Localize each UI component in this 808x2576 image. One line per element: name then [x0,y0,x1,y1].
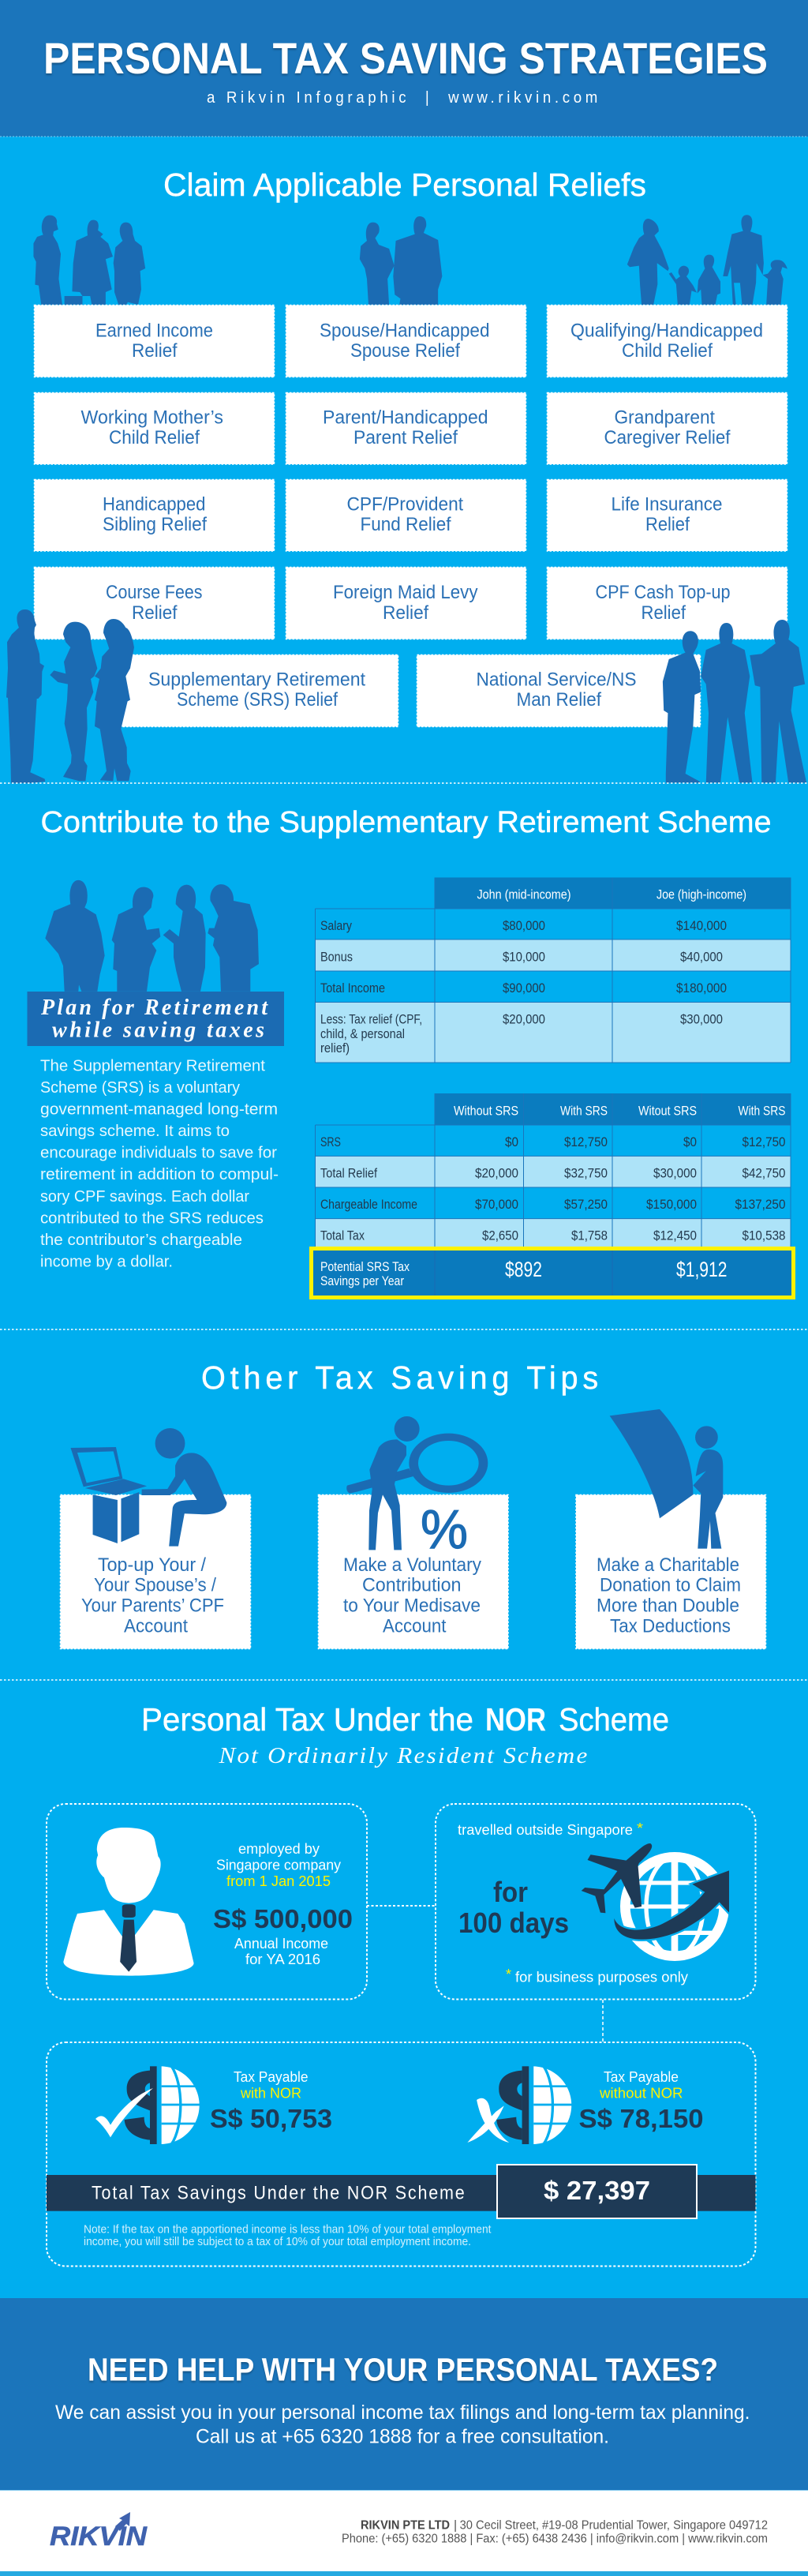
panel: travel days [436,1804,756,1999]
card: foreign maid levy: Relief [383,602,428,624]
table: John vs Joe income: Less: Tax relief (CPF, [320,1012,422,1026]
card: grandparent [548,393,787,464]
contact details: 30 Cecil Street, #19-08 Prudential Tower, Singapore 049712 [460,2518,768,2532]
panel: annual income: from 1 Jan 2015 [226,1873,331,1889]
panel: tax payable comparison: S$ 50,753 [210,2104,332,2133]
table: with and without SRS: $2,650 [482,1229,518,1243]
panel: CPF top-up tip: Account [124,1615,188,1637]
card: parent relief [286,393,526,464]
icon: person with magnifier [346,1416,488,1550]
paragraph: SRS explanation [40,1058,279,1271]
table: with and without SRS: $30,000 [653,1166,697,1180]
contact details: | [454,2518,457,2532]
table: with and without SRS: $70,000 [475,1198,518,1212]
banner: plan for retirement [27,992,284,1046]
panel: CPF top-up tip: Your Spouse’s / [94,1575,216,1596]
icon: percent sign: % [421,1498,468,1560]
panel: travel days: travelled outside Singapore [458,1821,633,1838]
contact details: Phone: (+65) 6320 1888 | Fax: (+65) 6438 2436 | info@rikvin.com | www.rikvin.com [342,2533,768,2546]
icon: dollar globe with check [95,2066,200,2144]
call to action panel: Call us at +65 6320 1888 for a free consultation. [196,2426,609,2448]
panel: CPF top-up tip [60,1428,251,1648]
paragraph: SRS explanation: sory CPF savings. Each dollar [40,1188,249,1206]
panel: donation tip: More than Double [597,1595,739,1617]
silhouettes above relief cards [33,215,787,305]
table: John vs Joe income: $10,000 [503,951,545,965]
card: CPF cash top-up: CPF Cash Top-up [595,582,731,603]
panel: annual income: employed by [238,1840,320,1857]
card: working mother: Child Relief [109,427,200,448]
note text: income, you will still be subject to a tax of 10% of your total employment income. [84,2235,471,2248]
panel: donation tip: Tax Deductions [610,1615,731,1637]
band label: Total Tax Savings Under the NOR Scheme [92,2183,466,2204]
silhouettes: four people talking [45,880,259,992]
table: with and without SRS: $12,750 [742,1135,786,1149]
card: earned income: Earned Income [95,321,213,341]
panel: CPF top-up tip: Your Parents’ CPF [81,1595,224,1617]
callout: potential SRS tax savings: Savings per Year [320,1274,404,1288]
callout: potential SRS tax savings: $1,912 [676,1258,728,1281]
table: John vs Joe income: Salary [320,919,353,933]
panel: travel days: for [493,1876,528,1908]
panel: Medisave tip: Make a Voluntary [343,1554,481,1576]
callout: savings amount [497,2165,697,2218]
section heading: SRS: Contribute to the Supplementary Retirement Scheme [41,806,772,839]
table: with and without SRS: $57,250 [564,1198,608,1212]
table: with and without SRS: $150,000 [646,1198,697,1212]
panel: tax payable comparison: Tax Payable [604,2068,679,2085]
contact details [342,2518,768,2546]
card: child relief: Child Relief [622,340,713,362]
table: John vs Joe income: $180,000 [676,981,727,996]
footer [0,2490,808,2576]
table: with and without SRS: With SRS [560,1104,608,1119]
card: spouse relief: Spouse Relief [350,340,460,362]
section heading: NOR scheme: Scheme [559,1701,669,1738]
call to action panel: We can assist you in your personal income tax filings and long-term tax planning. [55,2402,750,2424]
card: national service: National Service/NS [477,669,636,690]
silhouettes: business women and man, left [6,609,134,783]
table: with and without SRS: $0 [683,1135,697,1149]
panel: Medisave tip: to Your Medisave [343,1595,481,1617]
header banner [0,0,808,137]
card: CPF cash top-up: Relief [641,602,686,624]
card: child relief: Qualifying/Handicapped [570,321,763,341]
table: John vs Joe income: Total Income [320,981,385,996]
card: parent relief: Parent/Handicapped [323,407,488,428]
panel: donation tip: Make a Charitable [597,1554,739,1576]
panel: annual income: S$ 500,000 [213,1904,353,1933]
card: earned income [35,305,275,377]
table: with and without SRS: $12,750 [564,1135,608,1149]
panel: tax payable comparison: without NOR [599,2085,683,2102]
call to action panel: NEED HELP WITH YOUR PERSONAL TAXES? [88,2352,718,2388]
icon: person at laptop [70,1428,226,1547]
icon: person holding large sheet [610,1409,723,1549]
card: CPF provident [286,480,526,551]
table: John vs Joe income: child, & personal [320,1027,405,1041]
paragraph: SRS explanation: contributed to the SRS reduces [40,1209,264,1227]
card: CPF cash top-up [548,567,787,639]
table: with and without SRS: $10,538 [742,1229,786,1243]
paragraph: SRS explanation: government-managed long-term [40,1101,278,1119]
callout: savings amount: $ 27,397 [544,2176,650,2205]
card: foreign maid levy: Foreign Maid Levy [333,582,478,603]
table: John vs Joe income: $20,000 [503,1012,545,1026]
relief cards grid [35,305,787,726]
card: course fees: Course Fees [106,582,202,603]
section heading: personal reliefs: Claim Applicable Personal Reliefs [163,167,646,203]
card: course fees: Relief [132,602,178,624]
card: spouse relief: Spouse/Handicapped [320,321,489,341]
connector lines between NOR panels [367,1905,436,1907]
band: total tax savings [47,2175,756,2211]
card: life insurance [548,480,787,551]
section heading: other tips: Other Tax Saving Tips [201,1359,603,1396]
note text: Note: If the tax on the apportioned income is less than 10% of your total employment [84,2223,492,2237]
table: John vs Joe income: $40,000 [680,951,723,965]
table: John vs Joe income: Joe (high-income) [656,887,746,902]
table: John vs Joe income: John (mid-income) [477,887,571,902]
card: SRS relief: Supplementary Retirement [148,669,365,690]
card: SRS relief [115,655,398,726]
subtitle: a Rikvin Infographic | www.rikvin.com [207,89,601,107]
table: with and without SRS: $12,450 [653,1229,697,1243]
panel: CPF top-up tip: Top-up Your / [98,1554,206,1576]
card: earned income: Relief [132,340,178,362]
table: John vs Joe income [316,878,791,1063]
card: working mother [35,393,275,464]
panel: donation tip: Donation to Claim [600,1575,741,1596]
card: life insurance: Life Insurance [611,494,723,515]
paragraph: SRS explanation: income by a dollar. [40,1254,173,1271]
card: grandparent: Grandparent [614,407,715,428]
callout: potential SRS tax savings: $892 [505,1258,542,1281]
panel: tax payable comparison: with NOR [240,2085,301,2102]
callout: potential SRS tax savings [311,1249,794,1298]
table: John vs Joe income: Bonus [320,951,353,965]
paragraph: SRS explanation: The Supplementary Retirement [40,1058,265,1075]
paragraph: SRS explanation: savings scheme. It aims to [40,1123,230,1140]
table: with and without SRS: With SRS [739,1104,786,1119]
panel: travel days: * [506,1966,511,1982]
panel: tax payable comparison: Tax Payable [234,2068,308,2085]
card: grandparent: Caregiver Relief [604,427,731,448]
panel: annual income: Singapore company [216,1857,342,1873]
paragraph: SRS explanation: encourage individuals to save for [40,1145,277,1162]
banner: plan for retirement: while saving taxes [52,1018,264,1042]
table: John vs Joe income: $80,000 [503,919,545,933]
panel: donation tip [576,1409,765,1648]
section heading: NOR scheme: Personal Tax Under the [141,1701,473,1738]
table: with and without SRS: $0 [505,1135,518,1149]
panel: Medisave tip: Account [383,1615,447,1637]
icon: businessman [63,1828,194,1976]
card: working mother: Working Mother’s [80,407,223,428]
call to action panel [0,2298,808,2490]
paragraph: SRS explanation: retirement in addition to compul- [40,1166,279,1183]
table: with and without SRS: Chargeable Income [320,1198,417,1212]
contact details: RIKVIN PTE LTD [361,2518,450,2532]
panel: travel days: 100 days [458,1907,569,1939]
card: sibling: Sibling Relief [103,514,207,535]
table: with and without SRS: Total Tax [320,1229,365,1243]
table: with and without SRS: $137,250 [735,1198,786,1212]
table: with and without SRS [316,1093,791,1249]
table: John vs Joe income: $140,000 [676,919,727,933]
panel: tax payable comparison [47,2042,756,2266]
section heading: NOR scheme: NOR [485,1701,546,1738]
panel: travel days: for business purposes only [515,1969,689,1985]
card: CPF provident: CPF/Provident [347,494,463,515]
table: with and without SRS: $32,750 [564,1166,608,1180]
table: John vs Joe income: relief) [320,1041,350,1056]
note text [84,2223,492,2248]
card: sibling: Handicapped [103,494,205,515]
card: parent relief: Parent Relief [354,427,458,448]
card: course fees [35,567,275,639]
panel: annual income [47,1804,367,1999]
banner: plan for retirement: Plan for Retirement [40,996,268,1020]
table: with and without SRS: $42,750 [742,1166,786,1180]
panel: annual income: Annual Income [234,1935,328,1952]
card: national service [417,655,701,726]
table: with and without SRS: Without SRS [454,1104,518,1119]
card: CPF provident: Fund Relief [360,514,451,535]
card: national service: Man Relief [516,689,601,711]
table: with and without SRS: Total Relief [320,1166,377,1180]
card: child relief [548,305,787,377]
table: with and without SRS: $1,758 [571,1229,608,1243]
panel: annual income: for YA 2016 [245,1951,320,1967]
silhouettes: business men, right [663,620,806,783]
card: SRS relief: Scheme (SRS) Relief [177,689,338,711]
section heading: NOR scheme [141,1701,669,1738]
paragraph: SRS explanation: the contributor’s chargeable [40,1232,242,1249]
icon: globe and plane [582,1843,729,1956]
table: with and without SRS: SRS [320,1135,341,1149]
table: John vs Joe income: $90,000 [503,981,545,996]
card: life insurance: Relief [645,514,690,535]
subheading: not ordinarily resident: Not Ordinarily Resident Scheme [218,1744,589,1768]
card: foreign maid levy [286,567,526,639]
panel: travel days: * [637,1820,643,1836]
card: sibling [35,480,275,551]
panel: tax payable comparison: S$ 78,150 [579,2104,704,2133]
card: spouse relief [286,305,526,377]
table: John vs Joe income: $30,000 [680,1012,723,1026]
logo: Rikvin: RIKVIN [50,2522,148,2552]
callout: potential SRS tax savings: Potential SRS Tax [320,1260,410,1274]
panel: Medisave tip [319,1416,508,1648]
paragraph: SRS explanation: Scheme (SRS) is a voluntary [40,1079,240,1097]
table: with and without SRS: Witout SRS [638,1104,697,1119]
table: with and without SRS: $20,000 [475,1166,518,1180]
panel: Medisave tip: Contribution [362,1575,461,1596]
icon: dollar globe with cross [467,2066,572,2144]
